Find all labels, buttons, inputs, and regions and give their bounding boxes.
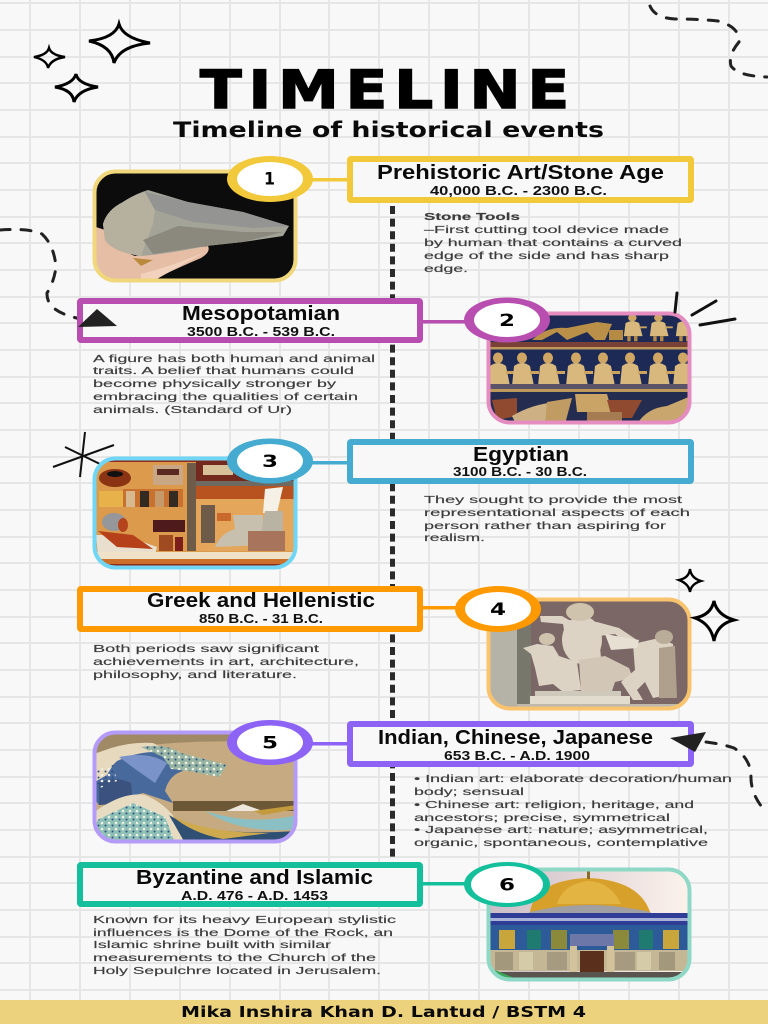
number badge 1: 1 (264, 170, 275, 188)
number badge 6 (464, 862, 550, 907)
number badge 6: 6 (499, 876, 515, 894)
text: greek description: achievements in art, architecture, (93, 656, 359, 668)
text: stone tools: –First cutting tool device made (424, 224, 669, 236)
number badge 4 (455, 586, 541, 632)
text: asian art bullets: body; sensual (414, 786, 524, 798)
connector (310, 742, 350, 746)
footer bar: Mika Inshira Khan D. Lantud / BSTM 4 (181, 1003, 586, 1021)
image: standard of ur (487, 312, 700, 424)
image: laocoon statue (487, 598, 691, 710)
icon: sparkle stars top left (34, 24, 150, 102)
dashed curve with arrowhead right (670, 732, 767, 813)
text: egyptian description: They sought to provide the most (424, 494, 682, 506)
text: byzantine description: Islamic shrine built with similar (93, 939, 332, 951)
dashed curve top right (650, 6, 767, 77)
panel: 3 egyptian (93, 438, 691, 569)
number badge 4: 4 (490, 600, 506, 619)
text: byzantine description (93, 914, 396, 977)
text: stone tools: edge of the side and has sharp (424, 250, 669, 262)
text: greek description (93, 643, 359, 681)
header: mesopotamian: 3500 B.C. - 539 B.C. (187, 324, 335, 339)
number badge 3 (227, 438, 313, 484)
number badge 2 (464, 298, 550, 342)
connector (420, 606, 458, 610)
image: stone tool (93, 170, 297, 282)
header: byzantine: A.D. 476 - A.D. 1453 (181, 888, 328, 903)
text: stone tools: by human that contains a curved (424, 237, 682, 249)
text: asian art bullets: • Indian art: elaborate decoration/human (414, 773, 732, 785)
header: egyptian (350, 442, 691, 481)
text: asian art bullets (414, 773, 732, 849)
text: stone tools: edge. (424, 263, 468, 275)
text: byzantine description: measurements to the Church of the (93, 952, 376, 964)
panel: 4 greek (80, 586, 691, 710)
panel: 2 mesopotamian (80, 298, 700, 424)
number badge 5: 5 (262, 734, 278, 752)
text: egyptian description (424, 494, 690, 544)
text: asian art bullets: ancestors; precise, symmetrical (414, 812, 670, 824)
connector (420, 320, 466, 324)
subtitle: Timeline of historical events (173, 118, 604, 142)
text: stone tools: Stone Tools (424, 211, 520, 223)
header: prehistoric art (350, 159, 691, 200)
text: greek description: philosophy, and literature. (93, 669, 297, 681)
text: mesopotamian description: A figure has both human and animal (93, 353, 375, 365)
header: greek (80, 589, 420, 629)
connector (310, 178, 350, 182)
text: mesopotamian description: become physically stronger by (93, 378, 337, 390)
image: great wave (93, 731, 297, 843)
text: mesopotamian description: animals. (Standard of Ur) (93, 404, 292, 416)
header: egyptian: Egyptian (473, 444, 569, 466)
header: egyptian: 3100 B.C. - 30 B.C. (453, 464, 587, 479)
panel: 5 asian art (93, 720, 732, 849)
header: mesopotamian: Mesopotamian (182, 303, 340, 325)
header: prehistoric art: Prehistoric Art/Stone Age (377, 162, 664, 184)
icon: asterisk (53, 432, 114, 477)
number badge 5 (227, 720, 313, 765)
image: egyptian papyrus (93, 457, 297, 569)
connector (420, 882, 466, 886)
image: dome of the rock (487, 868, 691, 980)
arrowhead over mesopotamian box (78, 309, 117, 327)
text: byzantine description: Holy Sepulchre located in Jerusalem. (93, 965, 381, 977)
text: egyptian description: person rather than aspiring for (424, 520, 667, 532)
number badge 3: 3 (262, 452, 278, 471)
header: indian chinese japanese: 653 B.C. - A.D. 1900 (444, 748, 590, 763)
dashed curve left (0, 230, 81, 319)
header: greek: 850 B.C. - 31 B.C. (199, 611, 323, 626)
number badge 1 (227, 156, 313, 202)
text: byzantine description: influences is the Dome of the Rock, an (93, 927, 393, 939)
text: stone tools (424, 211, 682, 275)
text: byzantine description: Known for its heavy European stylistic (93, 914, 396, 926)
title: TIMELINE (200, 60, 576, 121)
panel: 6 byzantine (80, 862, 691, 980)
header: indian chinese japanese: Indian, Chinese, Japanese (378, 727, 653, 749)
text: egyptian description: representational aspects of each (424, 507, 690, 519)
header: byzantine (80, 865, 420, 904)
text: mesopotamian description: embracing the qualities of certain (93, 391, 358, 403)
text: asian art bullets: organic, spontaneous, contemplative (414, 837, 708, 849)
text: asian art bullets: • Chinese art: religion, heritage, and (414, 799, 694, 811)
header: byzantine: Byzantine and Islamic (136, 867, 373, 889)
header: mesopotamian (80, 301, 420, 340)
panel: 1 prehistoric art (93, 156, 691, 282)
dashed timeline spine (390, 206, 395, 860)
text: mesopotamian description (93, 353, 375, 416)
footer bar (0, 1000, 768, 1024)
icon: spark lines (675, 293, 735, 325)
header: indian chinese japanese (350, 724, 691, 764)
text: greek description: Both periods saw significant (93, 643, 319, 655)
connector (310, 461, 350, 464)
icon: sparkle stars right (679, 569, 734, 641)
header: greek: Greek and Hellenistic (147, 590, 375, 612)
text: egyptian description: realism. (424, 532, 485, 544)
text: mesopotamian description: traits. A belief that humans could (93, 365, 354, 377)
number badge 2: 2 (499, 311, 515, 330)
text: asian art bullets: • Japanese art: nature; asymmetrical, (414, 824, 708, 836)
header: prehistoric art: 40,000 B.C. - 2300 B.C. (430, 183, 607, 198)
